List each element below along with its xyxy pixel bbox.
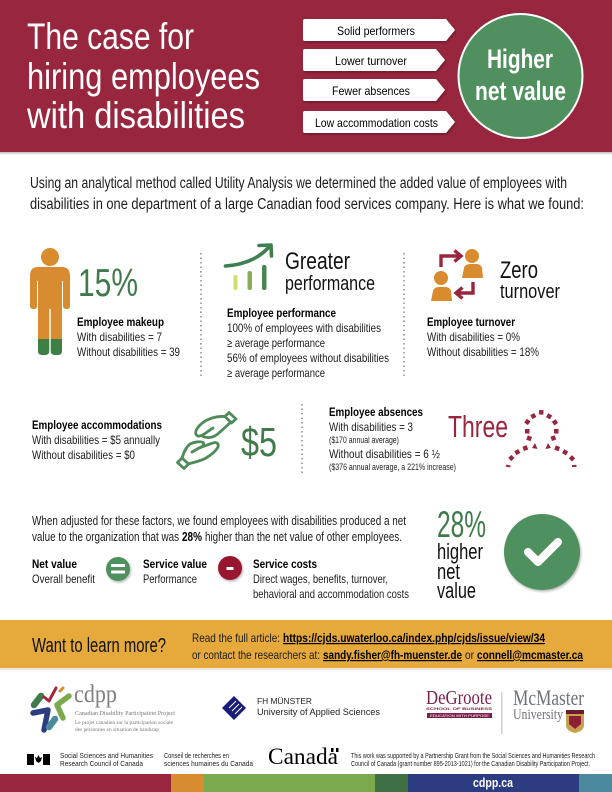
icon: minus [218,556,242,580]
term: service costs: behavioral and accommodation costs [253,587,409,601]
title: with disabilities [26,95,245,136]
stat: 15%: 15% [78,262,138,305]
logo: cdpp: cdpp [74,681,117,708]
icon: person [30,248,70,355]
stat: $5: $5 [241,419,277,465]
article link: Read the full article: [192,631,280,645]
makeup details: Without disabilities = 39 [77,345,180,359]
performance details: ≥ average performance [227,366,325,380]
absences details: With disabilities = 3 [329,420,413,434]
panel: employee turnover [427,249,560,359]
term: net value [32,557,96,586]
pill: lower turnover [303,49,445,71]
summary text: When adjusted for these factors, we found employees with disabilities produced a net [32,514,406,528]
stat: 28% higher net value: value [437,578,476,603]
heading: greater performance [285,248,375,295]
makeup details: Employee makeup [77,315,164,329]
footer colour strip [0,774,612,792]
pill: low accommodation costs [303,111,455,133]
summary text [32,514,406,544]
absences details [329,405,456,472]
term: service value: Performance [143,572,197,586]
logo: cdpp [33,681,175,733]
summary text: higher than the net value of other employees. [205,530,402,544]
panel: want to learn more [0,620,612,670]
performance details: Employee performance [227,306,336,320]
panel: employee accommodations [32,412,277,468]
contact links: sandy.fisher@fh-muenster.de [323,648,462,662]
heading: greater performance: performance [285,273,375,295]
icon: people swapping [431,249,483,301]
logo: McMaster University: University [513,707,563,723]
turnover details: Without disabilities = 18% [427,345,539,359]
logo: DeGroote School of Business: EDUCATION WITH PURPOSE [430,714,490,718]
logo: SSHRC Canada flag and name: Social Sciences and Humanities [60,753,153,760]
absences details: ($170 annual average) [329,435,399,445]
article link [192,631,545,645]
logo: cdpp: Le projet canadien sur la participation sociale [75,720,174,726]
makeup details [77,315,180,359]
header banner [0,0,612,155]
higher net value circle: Higher [487,44,553,74]
panel: employee absences [329,405,577,472]
higher net value circle: net value [475,76,566,106]
title [26,16,260,136]
logo: Canada wordmark: Canada [268,744,338,769]
icon: dotted person outline [506,410,577,467]
turnover details: Employee turnover [427,315,515,329]
contact links [192,648,583,662]
pill: lower turnover: Lower turnover [335,54,407,68]
makeup details: With disabilities = 7 [77,330,162,344]
logo: SSHRC Canada flag and name: sciences humaines du Canada [164,761,253,768]
performance details [227,306,389,380]
pill: low accommodation costs: Low accommodation costs [315,116,438,130]
logo: cdpp: des personnes en situation de handicap [75,727,159,733]
logo: SSHRC Canada flag and name [27,753,253,768]
summary text: 28% [182,530,202,544]
term: net value: Net value [32,557,77,571]
heading: greater performance: Greater [285,248,350,275]
absences details: Employee absences [329,405,423,419]
heading: learn more: Want to learn more? [32,635,166,657]
stat: 28% higher net value [437,504,486,603]
pill: solid performers [303,19,455,41]
higher net value circle [458,14,582,138]
logo: FH Münster: FH MÜNSTER [257,697,312,706]
stat: 28% higher net value: 28% [437,504,486,545]
accommodations details: Employee accommodations [32,418,162,432]
title: The case for [27,16,194,57]
intro text [30,175,584,213]
logo: FH Münster [222,696,380,720]
term: service value: Service value [143,557,207,571]
absences details: Without disabilities = 6 ½ [329,447,440,461]
logo: DeGroote School of Business: DeGroote [426,687,492,709]
funding acknowledgement [351,753,595,768]
term: service costs [253,557,409,601]
stat: 28% higher net value: higher [437,539,483,564]
performance details: ≥ average performance [227,336,325,350]
term: net value: Overall benefit [32,572,96,586]
icon: equals [106,557,130,581]
pill: solid performers: Solid performers [337,24,415,38]
footer url: cdpp.ca [473,776,514,790]
term: service value [143,557,207,586]
accommodations details: With disabilities = $5 annually [32,433,160,447]
panel: net value explanation [32,514,409,601]
turnover details: With disabilities = 0% [427,330,520,344]
logo: McMaster University: McMaster [513,685,585,710]
icon: check circle [504,514,580,590]
absences details: ($376 annual average, a 221% increase) [329,462,456,472]
logo: SSHRC Canada flag and name: Conseil de recherches en [164,753,229,760]
pill: fewer absences [303,79,445,101]
heading: zero turnover: turnover [500,281,560,303]
term: service costs: Direct wages, benefits, turnover, [253,572,388,586]
logo: SSHRC Canada flag and name: Research Council of Canada [60,761,143,768]
turnover details [427,315,539,359]
logo: FH Münster: University of Applied Sciences [257,707,380,718]
accommodations details: Without disabilities = $0 [32,448,135,462]
performance details: 100% of employees with disabilities [227,321,381,335]
term: service costs: Service costs [253,557,317,571]
heading: zero turnover [500,257,560,303]
heading: zero turnover: Zero [500,257,538,284]
contact links: or [465,648,474,662]
logo: cdpp: Canadian Disability Participation Project [75,711,175,717]
pill: fewer absences: Fewer absences [332,84,410,98]
performance details: 56% of employees without disabilities [227,351,389,365]
stat: three: Three [448,409,508,444]
icon: growth chart [226,245,272,290]
icon: cdpp mark [33,688,69,730]
summary text: value to the organization that was [32,530,179,544]
logo: McMaster University [513,685,585,733]
title: hiring employees [27,56,260,97]
panel: employee performance [226,245,389,380]
logo: DeGroote School of Business [426,687,492,718]
panel: employee makeup [30,248,180,359]
icon: hands [178,412,236,468]
article link: https://cjds.uwaterloo.ca/index.php/cjds/issue/view/34 [283,631,545,645]
stat: 28% higher net value: net [437,559,460,584]
contact links: or contact the researchers at: [192,648,320,662]
logo: DeGroote School of Business: SCHOOL OF BUSINESS [426,706,492,711]
accommodations details [32,418,162,462]
contact links: connell@mcmaster.ca [477,648,583,662]
